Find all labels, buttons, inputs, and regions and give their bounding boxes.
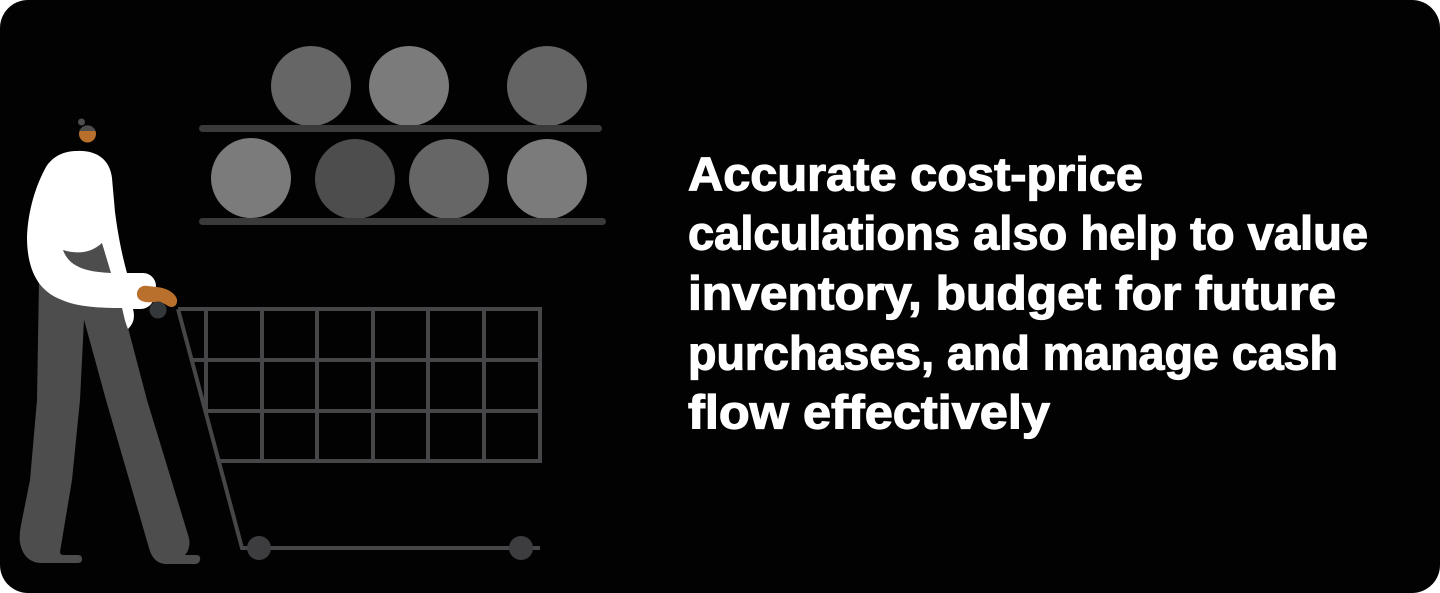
main statement text: flow effectively — [688, 386, 1050, 438]
cart handle knob — [150, 302, 166, 318]
cart grid — [178, 309, 540, 548]
lower shelf — [199, 218, 606, 225]
head — [78, 118, 96, 142]
balls on lower shelf — [211, 138, 587, 219]
illustration: shopper figure — [20, 118, 200, 564]
main statement text: purchases, and manage cash — [688, 326, 1338, 380]
trousers — [20, 280, 200, 564]
illustration: shopping cart — [178, 309, 540, 560]
main statement text: Accurate cost-price — [688, 148, 1143, 200]
main statement text: inventory, budget for future — [688, 266, 1336, 320]
cart wheels — [247, 536, 533, 560]
balls on top shelf — [271, 46, 587, 126]
top shelf — [199, 125, 602, 132]
hand — [137, 286, 177, 307]
main statement text: calculations also help to value — [688, 206, 1368, 260]
illustration: shelves with balls — [199, 46, 606, 225]
main statement text — [688, 148, 1368, 438]
white sweater — [27, 151, 156, 329]
sweater shadow — [63, 243, 111, 273]
